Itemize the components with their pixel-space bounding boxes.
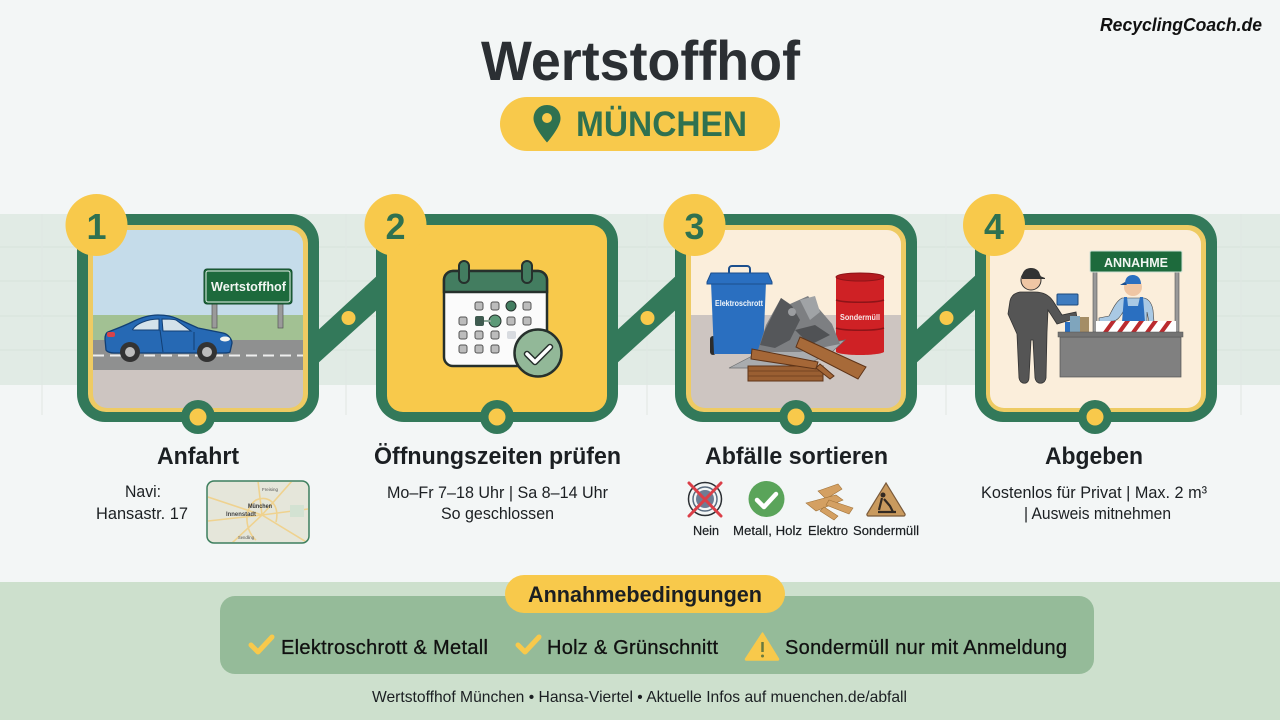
icon: red barrel <box>836 273 884 355</box>
badge: number 3 <box>664 194 726 256</box>
icon: city map: Sendling <box>238 535 254 540</box>
connector 1 to 2 <box>316 273 380 365</box>
badge: number 4: 4 <box>984 206 1004 247</box>
icon: road sign Wertstoffhof <box>204 269 292 328</box>
title: Wertstoffhof <box>481 29 800 92</box>
icon: check badge <box>514 330 562 376</box>
icon: red barrel: Sondermüll <box>840 312 880 322</box>
panel: step 4 Abgeben image <box>975 214 1217 422</box>
icon: road sign Wertstoffhof: Wertstoffhof <box>211 280 287 294</box>
text: drop-off notes <box>981 483 1207 523</box>
badge: number 3: 3 <box>684 206 705 247</box>
worker <box>1099 275 1154 322</box>
bottom node 3 <box>779 400 813 434</box>
heading: Abgeben: Abgeben <box>1045 443 1143 470</box>
text: opening hours: So geschlossen <box>441 504 554 523</box>
heading: Abfälle sortieren: Abfälle sortieren <box>705 443 888 470</box>
labels: sorting categories: Nein <box>693 523 719 538</box>
text: drop-off notes: | Ausweis mitnehmen <box>1024 504 1171 523</box>
badge: number 1: 1 <box>86 206 107 247</box>
bottom node 4 <box>1078 400 1112 434</box>
icon: acceptance stall: ANNAHME <box>1104 255 1168 270</box>
panel: step 1 Anfahrt image <box>77 214 319 422</box>
icon: blue car <box>105 315 232 362</box>
icon: map pin <box>534 105 560 142</box>
labels: sorting categories: Elektro <box>808 523 848 538</box>
connector 2 to 3 <box>615 273 679 365</box>
heading pill: Annahmebedingungen <box>505 575 785 613</box>
icon: wood pieces <box>806 484 853 520</box>
badge: number 2 <box>364 194 426 256</box>
text: navigation address: Navi: <box>125 482 161 501</box>
text: opening hours <box>387 483 608 523</box>
panel: step 3 Abfälle sortieren image <box>675 214 917 422</box>
item: Holz und Grünschnitt: Holz & Grünschnitt <box>547 637 718 659</box>
heading: Anfahrt: Anfahrt <box>157 443 239 470</box>
icon: city map: München <box>248 504 272 510</box>
icon: warning triangle <box>867 483 905 516</box>
icon: green check <box>748 481 784 517</box>
text: navigation address <box>96 482 188 523</box>
panel: Annahmebedingungen <box>220 575 1094 674</box>
heading: Öffnungszeiten prüfen: Öffnungszeiten prüfen <box>374 443 621 470</box>
icon: city map: Innenstadt <box>226 512 256 518</box>
icon: person with card <box>1008 268 1078 383</box>
bottom node 1 <box>181 400 215 434</box>
item: Sondermüll nur mit Anmeldung: Sondermüll nur mit Anmeldung <box>785 637 1067 659</box>
labels: sorting categories: Sondermüll <box>853 523 919 538</box>
panel: step 2 Öffnungszeiten image <box>376 214 618 422</box>
icon: calendar <box>444 261 547 366</box>
icon: Nein crossed out <box>688 482 722 516</box>
connector 3 to 4 <box>914 273 978 365</box>
icon: acceptance stall <box>1058 251 1183 377</box>
badge: number 4 <box>963 194 1025 256</box>
heading pill: Annahmebedingungen: Annahmebedingungen <box>528 582 762 607</box>
badge: number 1 <box>66 194 128 256</box>
badge: number 2: 2 <box>385 206 406 247</box>
location pill: München <box>500 97 780 151</box>
icon: blue bin <box>707 266 772 355</box>
text: navigation address: Hansastr. 17 <box>96 504 188 523</box>
location pill: München: MÜNCHEN <box>576 105 747 144</box>
bottom node 2 <box>480 400 514 434</box>
labels: sorting categories <box>693 523 919 538</box>
labels: sorting categories: Metall, Holz <box>733 523 802 538</box>
brand: RecyclingCoach.de: RecyclingCoach.de <box>1100 15 1262 35</box>
text: drop-off notes: Kostenlos für Privat | Max. 2 m³ <box>981 483 1207 502</box>
icon: city map: Freising <box>262 487 278 492</box>
icon: scrap metal pile <box>729 296 845 368</box>
item: Elektroschrott und Metall: Elektroschrott & Metall <box>281 637 488 659</box>
icon: city map <box>207 481 309 543</box>
icon: blue bin: Elektroschrott <box>715 298 763 308</box>
footer text: Wertstoffhof München • Hansa-Viertel • Aktuelle Infos auf muenchen.de/abfall <box>372 689 907 706</box>
text: opening hours: Mo–Fr 7–18 Uhr | Sa 8–14 Uhr <box>387 483 608 502</box>
icon: wood planks <box>748 337 866 381</box>
